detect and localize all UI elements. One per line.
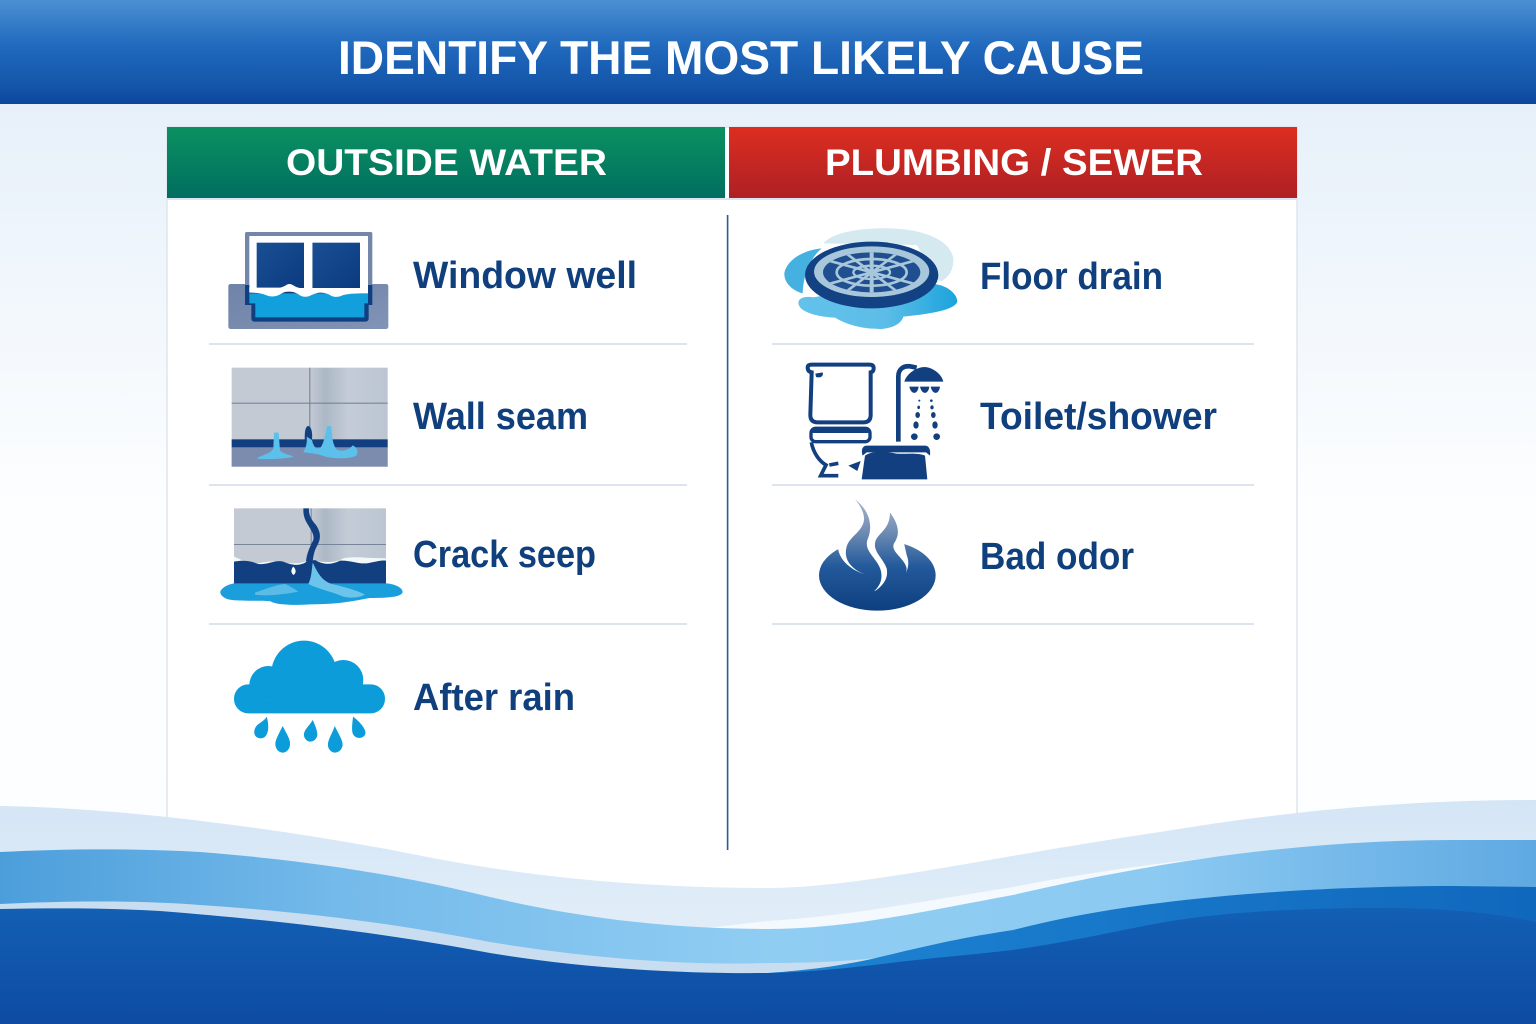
footer waves xyxy=(0,800,1536,1024)
label: toilet/shower: Toilet/shower xyxy=(980,396,1217,438)
label: after rain: After rain xyxy=(413,677,575,719)
panel: comparison table xyxy=(167,127,1297,902)
title: IDENTIFY THE MOST LIKELY CAUSE xyxy=(338,31,1144,84)
column header: outside water: OUTSIDE WATER xyxy=(286,142,607,183)
icon: bad odor xyxy=(819,499,936,611)
label: window well: Window well xyxy=(413,255,637,297)
column header: plumbing / sewer: PLUMBING / SEWER xyxy=(825,142,1203,183)
icon: wall seam xyxy=(232,368,388,467)
column header: plumbing / sewer xyxy=(729,127,1297,198)
icon: toilet and shower xyxy=(808,365,943,479)
icon: window well xyxy=(228,232,388,329)
label: crack seep: Crack seep xyxy=(413,534,596,576)
icon: after rain cloud xyxy=(234,641,385,753)
label: floor drain: Floor drain xyxy=(980,256,1163,298)
label: bad odor: Bad odor xyxy=(980,536,1134,578)
icon: crack seep xyxy=(220,508,403,605)
label: wall seam: Wall seam xyxy=(413,396,588,438)
column header: outside water xyxy=(167,127,725,198)
icon: floor drain xyxy=(784,228,957,329)
header banner xyxy=(0,0,1536,104)
